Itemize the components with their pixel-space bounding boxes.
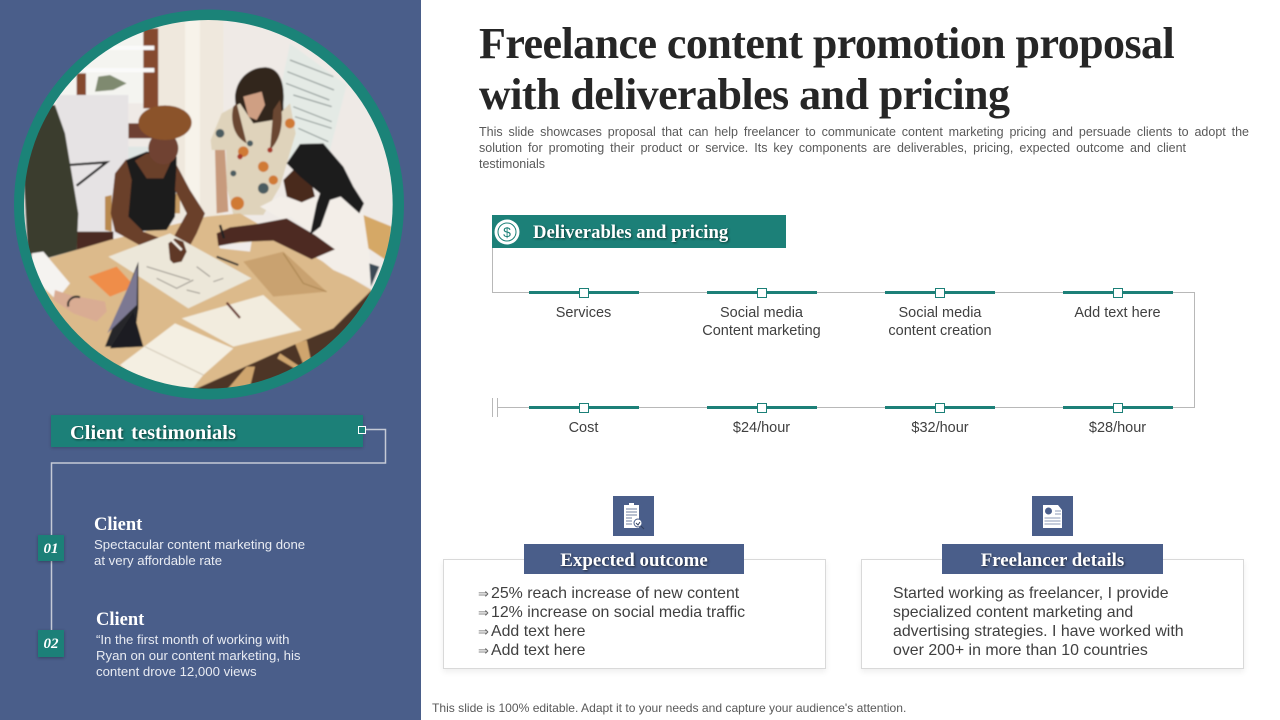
panel: expected outcome: [443, 559, 826, 669]
label: social media content creation: [888, 305, 992, 339]
description text: This slide showcases proposal that can help freelancer to communicate content marketing pricing and persuade clients to adopt the: [479, 125, 1249, 139]
connector: testimonial timeline line: [50, 426, 386, 630]
table objects: [243, 252, 327, 297]
list: expected outcomes: ⇒: [478, 586, 489, 601]
list: expected outcomes: Add text here: [491, 623, 586, 640]
badge: 02: 02: [44, 636, 58, 652]
heading: expected outcome: Expected outcome: [560, 550, 708, 571]
text: freelancer details: advertising strategies. I have worked with: [893, 623, 1184, 640]
testimonial 1: Spectacular content marketing done: [94, 537, 305, 552]
panel: left blue sidebar: [0, 0, 421, 720]
list: expected outcomes: Add text here: [491, 642, 586, 659]
label: cost: Cost: [569, 420, 598, 436]
text: freelancer details: over 200+ in more than 10 countries: [893, 642, 1148, 659]
heading: deliverables and pricing: [492, 215, 786, 248]
label: social media content marketing: [702, 305, 821, 339]
label: social media content marketing: Content marketing: [702, 323, 821, 339]
text: freelancer details: specialized content marketing and: [893, 604, 1133, 621]
heading: freelancer details: Freelancer details: [981, 550, 1124, 571]
testimonial 2: Client: [96, 610, 144, 630]
woman in white: [260, 201, 370, 278]
testimonial 2: “In the first month of working with: [96, 632, 290, 647]
description text: solution for promoting their product or service. Its key components are deliverables, pricing, expected outcome and client: [479, 141, 1186, 155]
photo: team working at a table in a teal circular frame: [14, 10, 404, 400]
testimonial 1: at very affordable rate: [94, 553, 222, 568]
label: social media content creation: content creation: [888, 323, 992, 339]
label: services: Services: [556, 305, 611, 321]
list: expected outcomes: 12% increase on social media traffic: [491, 604, 745, 621]
panel: freelancer details: [861, 559, 1244, 669]
title: with deliverables and pricing: [479, 70, 1009, 119]
heading: deliverables and pricing: Deliverables and pricing: [533, 222, 728, 243]
chart: deliverables and pricing timeline: [492, 248, 1195, 417]
label: 24 per hour: $24/hour: [733, 420, 790, 436]
label: add text here: Add text here: [1074, 305, 1161, 321]
heading: expected outcome: [524, 544, 744, 574]
table: [20, 213, 372, 390]
standing woman: [234, 66, 285, 124]
testimonial 1: [94, 515, 305, 568]
footer note: This slide is 100% editable. Adapt it to your needs and capture your audience's attention.: [432, 701, 906, 715]
papers: [108, 233, 252, 308]
heading: freelancer details: [942, 544, 1163, 574]
label: social media content creation: Social media: [898, 305, 982, 321]
badge: 02: [38, 630, 64, 657]
text: freelancer details: [893, 585, 1184, 659]
list: expected outcomes: ⇒: [478, 605, 489, 620]
woman in black: [125, 150, 178, 232]
description text: [479, 125, 1249, 171]
text: freelancer details: Started working as freelancer, I provide: [893, 585, 1169, 602]
label: 28 per hour: $28/hour: [1089, 420, 1146, 436]
testimonial 2: content drove 12,000 views: [96, 664, 257, 679]
badge: 01: 01: [44, 541, 58, 557]
title: [479, 19, 1174, 119]
list: expected outcomes: ⇒: [478, 643, 489, 658]
heading: client testimonials: Client testimonials: [70, 422, 236, 444]
icon: dollar coin: [494, 220, 520, 244]
icon: clipboard checklist: [613, 496, 654, 536]
dark under-table floor: [196, 290, 372, 389]
list: expected outcomes: 25% reach increase of new content: [491, 585, 739, 602]
testimonial 1: Client: [94, 515, 142, 535]
testimonial 2: [96, 610, 301, 679]
icon: resume document: [1032, 496, 1073, 536]
label: social media content marketing: Social media: [720, 305, 803, 321]
title: Freelance content promotion proposal: [479, 19, 1174, 68]
icon: dollar coin: $: [503, 224, 511, 240]
list: expected outcomes: ⇒: [478, 624, 489, 639]
heading: client testimonials: [51, 415, 363, 447]
label: 32 per hour: $32/hour: [911, 420, 969, 436]
badge: 01: [38, 535, 64, 561]
testimonial 2: Ryan on our content marketing, his: [96, 648, 301, 663]
description text: testimonials: [479, 157, 545, 171]
list: expected outcomes: [478, 585, 745, 659]
